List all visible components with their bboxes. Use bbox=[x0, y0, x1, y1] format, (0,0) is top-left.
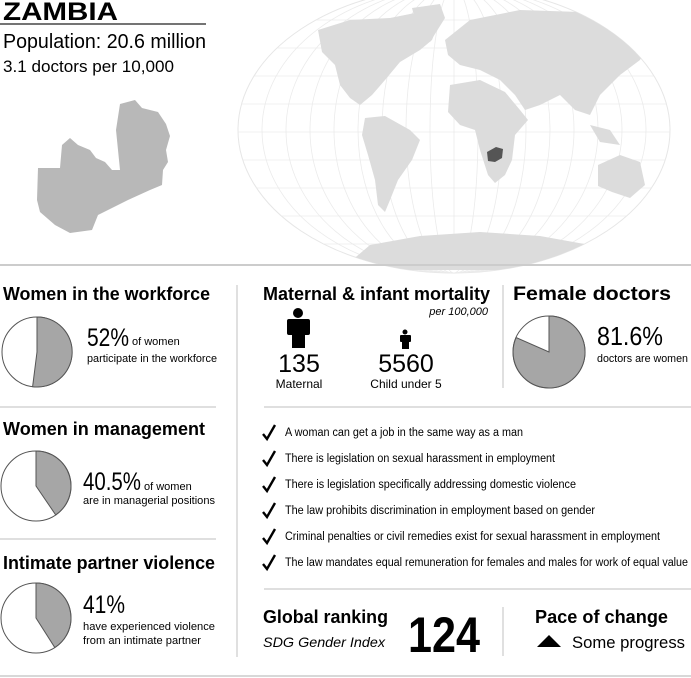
icon: up triangle bbox=[537, 635, 561, 647]
icon: adult figure bbox=[287, 308, 310, 348]
population text: Population: 20.6 million bbox=[3, 31, 206, 53]
subheading: SDG Gender Index: SDG Gender Index bbox=[263, 634, 386, 650]
panel: maternal & infant mortality bbox=[263, 284, 490, 391]
stat: child under 5 bbox=[370, 350, 442, 391]
stat: doctors bbox=[597, 321, 688, 365]
stat: IPV: from an intimate partner bbox=[83, 635, 201, 647]
pie: IPV 41% bbox=[1, 583, 71, 653]
panel: global ranking bbox=[263, 607, 480, 663]
subheading: per 100,000: per 100,000 bbox=[428, 306, 489, 318]
panel: female doctors bbox=[513, 284, 688, 388]
stat: workforce bbox=[87, 324, 217, 365]
check item 3: There is legislation specifically addressing domestic violence bbox=[285, 479, 576, 491]
panel: women in management bbox=[1, 419, 215, 521]
stat: IPV: 41% bbox=[83, 591, 125, 619]
stat: management bbox=[83, 468, 215, 507]
check item 2: There is legislation on sexual harassment in employment bbox=[285, 453, 556, 465]
heading: female doctors: Female doctors bbox=[513, 284, 671, 305]
status text: Some progress bbox=[572, 633, 685, 652]
panel: legal checklist bbox=[263, 425, 688, 569]
stat: maternal: 135 bbox=[278, 350, 320, 378]
heading: global ranking: Global ranking bbox=[263, 607, 388, 627]
stat: workforce: of women bbox=[132, 336, 180, 348]
icon: child figure bbox=[400, 330, 411, 349]
stat: doctors: doctors are women bbox=[597, 353, 688, 365]
stat: workforce: 52% bbox=[87, 324, 129, 352]
stat: maternal: Maternal bbox=[276, 377, 322, 391]
stat: child under 5: Child under 5 bbox=[370, 377, 442, 391]
pie: management 40.5% bbox=[1, 451, 71, 521]
zambia highlight bbox=[487, 147, 503, 162]
heading: pace of change: Pace of change bbox=[535, 607, 668, 627]
heading: IPV: Intimate partner violence bbox=[3, 553, 215, 573]
heading: management: Women in management bbox=[3, 419, 205, 439]
stat: management: of women bbox=[144, 481, 192, 493]
stat: child under 5: 5560 bbox=[378, 350, 434, 378]
stat: IPV: have experienced violence bbox=[83, 621, 215, 633]
check item 5: Criminal penalties or civil remedies exist for sexual harassment in employment bbox=[285, 531, 661, 543]
stat: management: 40.5% bbox=[83, 468, 141, 496]
stat: workforce: participate in the workforce bbox=[87, 353, 217, 365]
doctors per 10,000 text: 3.1 doctors per 10,000 bbox=[3, 57, 174, 76]
panel: pace of change bbox=[535, 607, 685, 652]
panel: women in the workforce bbox=[2, 284, 217, 387]
world map bbox=[230, 0, 680, 273]
check item 4: The law prohibits discrimination in employment based on gender bbox=[285, 505, 595, 517]
heading: workforce: Women in the workforce bbox=[3, 284, 210, 304]
panel: intimate partner violence bbox=[1, 553, 215, 653]
map: Zambia outline bbox=[37, 100, 170, 233]
stat: maternal bbox=[276, 350, 322, 391]
stat: management: are in managerial positions bbox=[83, 495, 215, 507]
check item 1: A woman can get a job in the same way as a man bbox=[285, 427, 523, 439]
ranking number: 124 bbox=[408, 607, 480, 663]
stat: doctors: 81.6% bbox=[597, 321, 663, 351]
pie: workforce 52% bbox=[2, 317, 72, 387]
stat: IPV bbox=[83, 591, 215, 647]
heading: mortality: Maternal & infant mortality bbox=[263, 284, 490, 304]
pie: doctors 81.6% bbox=[513, 316, 585, 388]
